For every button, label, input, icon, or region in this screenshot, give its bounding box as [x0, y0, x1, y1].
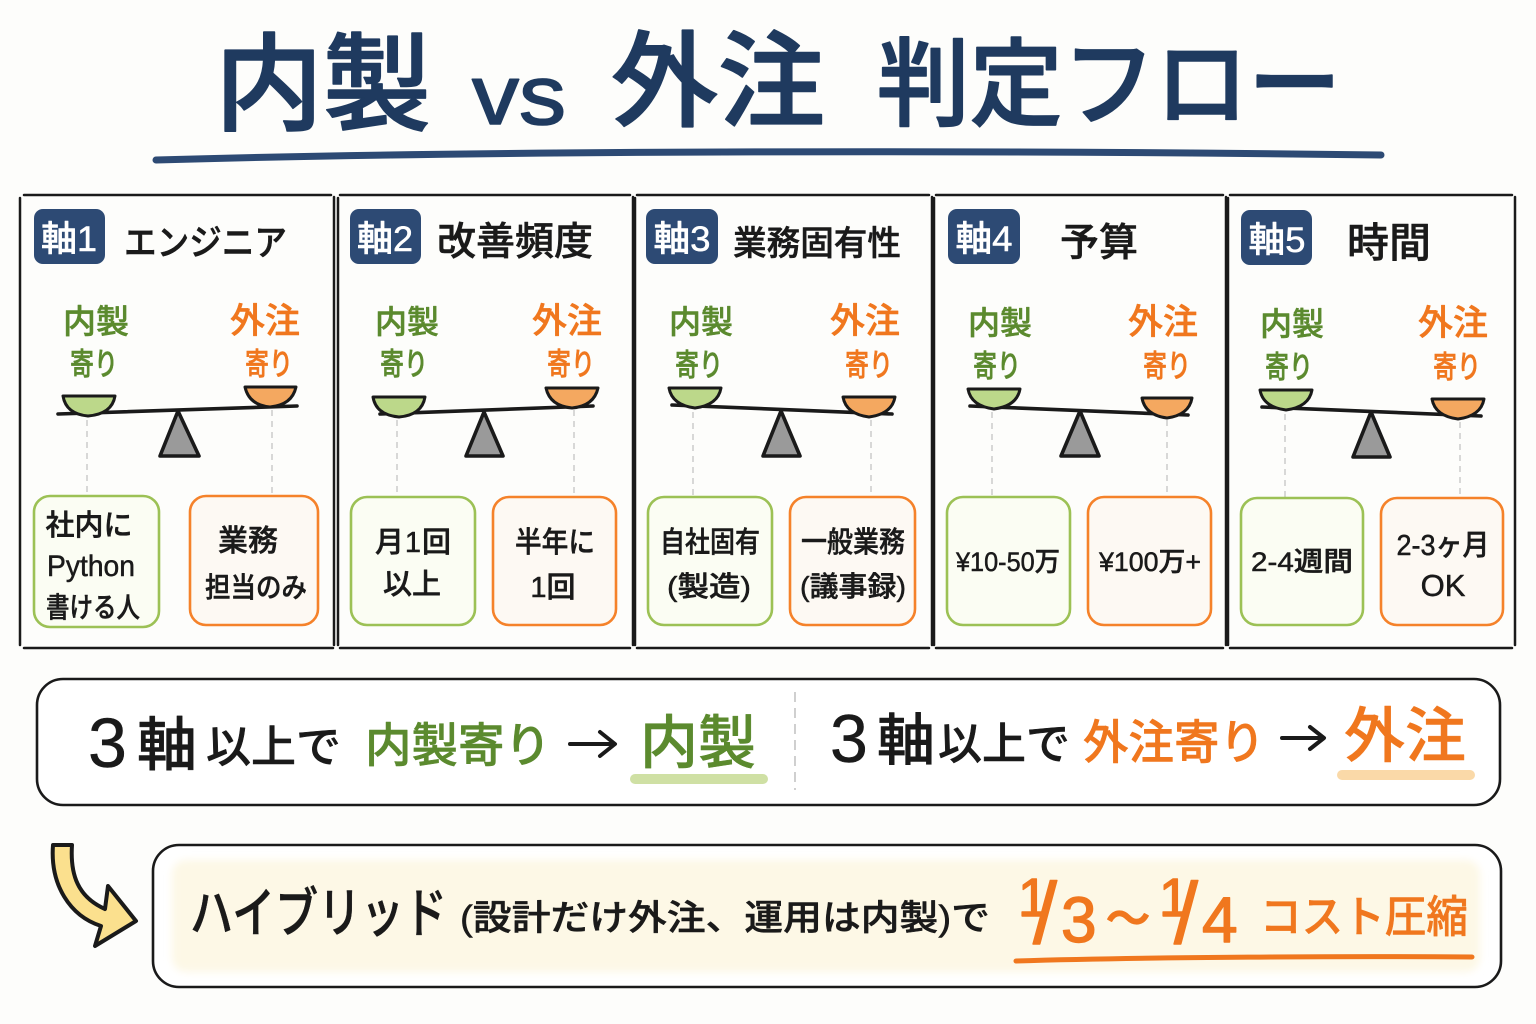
- heading: 時間: [1347, 220, 1431, 266]
- label: 内製寄り: 寄り: [675, 348, 723, 383]
- tag: 軸3: [646, 209, 718, 264]
- rule text: 内製: 内製寄り: [365, 719, 551, 772]
- hybrid text: [190, 884, 990, 944]
- cost reduction: [1018, 866, 1468, 962]
- cost reduction: /: [1033, 866, 1057, 962]
- box: 外注 condition: [1088, 497, 1211, 625]
- label: 内製寄り: 内製: [375, 304, 439, 340]
- label: 内製寄り: [1260, 306, 1324, 385]
- box: 内製 condition: 社内に: [45, 509, 133, 542]
- panel: 軸4 予算: [934, 195, 1226, 648]
- rule text: 内製: [88, 704, 756, 782]
- rule text: 外注: 軸: [877, 709, 935, 772]
- rule text: 内製: 以上で: [206, 723, 341, 772]
- panel: 軸2 改善頻度: [338, 195, 633, 648]
- label: 内製寄り: [63, 303, 129, 382]
- label: 外注寄り: 寄り: [547, 347, 595, 382]
- cost reduction: ～: [1106, 895, 1150, 944]
- label: 外注寄り: [532, 302, 602, 382]
- title: vs: [472, 48, 566, 142]
- box: 内製 condition: (製造): [667, 571, 751, 602]
- title underline: [156, 152, 1381, 160]
- tag: 軸3: 軸3: [654, 220, 710, 259]
- box: 外注 condition: 業務: [218, 525, 278, 558]
- box: 内製 condition: [947, 497, 1070, 625]
- panel: 軸3 業務固有性: [635, 195, 932, 648]
- icon: curved arrow: [53, 845, 136, 946]
- label: 外注寄り: 寄り: [1143, 349, 1191, 384]
- title: 外注: [611, 25, 825, 141]
- label: 外注寄り: [830, 302, 900, 383]
- box: 外注 condition: 1回: [530, 572, 576, 604]
- underline: [1016, 957, 1472, 961]
- heading: 予算: [1060, 222, 1138, 265]
- box: 外注 condition: ¥100万+: [1098, 547, 1201, 577]
- tag: 軸1: 軸1: [41, 220, 97, 259]
- label: 内製寄り: 寄り: [1265, 350, 1313, 385]
- highlight: 内製: [635, 774, 763, 784]
- label: 内製寄り: 内製: [968, 305, 1032, 341]
- label: 内製寄り: [968, 305, 1032, 384]
- cost reduction: 1: [1159, 868, 1189, 928]
- panel: decision rule: [37, 679, 1500, 805]
- box: 内製 condition: [1241, 498, 1363, 625]
- label: 外注寄り: [1128, 303, 1198, 384]
- box: 外注 condition: [493, 497, 616, 625]
- box: 外注 condition: [190, 496, 318, 625]
- label: 外注寄り: 外注: [1128, 303, 1198, 342]
- panel: 軸5 時間: [1228, 195, 1515, 648]
- box: 外注 condition: 2-3ヶ月: [1396, 530, 1490, 562]
- box: 内製 condition: 書ける人: [46, 592, 140, 623]
- label: 外注寄り: 寄り: [1433, 350, 1481, 385]
- box: 外注 condition: [790, 497, 915, 625]
- scale tilted to 内製 up: [1260, 390, 1484, 498]
- label: 外注寄り: 外注: [230, 302, 300, 341]
- title: [215, 25, 1341, 145]
- label: 外注寄り: 寄り: [245, 347, 293, 382]
- divider: [794, 692, 796, 790]
- heading: 業務固有性: [733, 225, 901, 263]
- arrow: 内製 rule: [570, 732, 615, 756]
- rule text: 外注: 3: [830, 701, 868, 777]
- scale tilted to 外注 up: [58, 387, 297, 498]
- label: 内製寄り: 内製: [1260, 306, 1324, 342]
- cost reduction: コスト圧縮: [1260, 893, 1468, 942]
- label: 内製寄り: 寄り: [380, 347, 428, 382]
- label: 内製寄り: [375, 304, 439, 382]
- box: 内製 condition: Python: [47, 550, 135, 583]
- cost reduction: 1: [1018, 868, 1048, 928]
- cost reduction: /: [1174, 866, 1198, 962]
- box: 内製 condition: 月1回: [375, 527, 451, 559]
- tag: 軸1: [34, 209, 105, 264]
- label: 内製寄り: 寄り: [973, 349, 1021, 384]
- rule text: 外注: 外注寄り: [1083, 716, 1265, 769]
- box: 内製 condition: ¥10-50万: [955, 547, 1060, 577]
- box: 外注 condition: OK: [1421, 568, 1466, 603]
- label: 内製寄り: [669, 304, 733, 383]
- tag: 軸5: 軸5: [1248, 221, 1306, 260]
- highlight: 外注: [1342, 770, 1470, 780]
- scale tilted to 内製 up: [669, 388, 895, 497]
- rule text: 外注: [830, 701, 1466, 777]
- hybrid text: ハイブリッド: [190, 884, 447, 944]
- tag: 軸2: [350, 209, 421, 264]
- box: 内製 condition: [351, 497, 475, 625]
- label: 内製寄り: 寄り: [70, 347, 118, 382]
- cost reduction: 4: [1202, 884, 1238, 956]
- rule text: 内製: 3: [88, 704, 127, 782]
- rule text: 外注: 外注: [1344, 703, 1466, 770]
- label: 内製寄り: 内製: [63, 303, 129, 340]
- box: 外注 condition: 担当のみ: [205, 572, 307, 603]
- arrow: 外注 rule: [1282, 727, 1324, 749]
- scale tilted to 外注 up: [373, 388, 598, 498]
- label: 外注寄り: [230, 302, 300, 382]
- rule text: 内製: 軸: [137, 713, 197, 778]
- rule text: 内製: 内製: [640, 711, 756, 776]
- box: 外注 condition: [1381, 498, 1503, 625]
- box: 内製 condition: 以上: [383, 569, 441, 601]
- scale tilted to 内製 up: [968, 389, 1192, 497]
- heading: エンジニア: [124, 222, 287, 263]
- cost reduction: 3: [1061, 884, 1097, 956]
- label: 外注寄り: [1418, 304, 1488, 385]
- box: 外注 condition: (議事録): [800, 571, 906, 602]
- box: 内製 condition: 自社固有: [660, 526, 760, 559]
- box: 内製 condition: 2-4週間: [1251, 547, 1353, 577]
- label: 外注寄り: 外注: [532, 302, 602, 341]
- box: 外注 condition: 半年に: [515, 526, 595, 559]
- tag: 軸4: [948, 209, 1020, 264]
- panel: 軸1 エンジニア: [20, 195, 334, 648]
- label: 外注寄り: 外注: [830, 302, 900, 341]
- label: 内製寄り: 内製: [669, 304, 733, 340]
- tag: 軸4: 軸4: [956, 220, 1012, 259]
- wash: [172, 860, 1480, 972]
- heading: 改善頻度: [437, 221, 593, 264]
- title: 内製: [215, 27, 431, 145]
- tag: 軸5: [1241, 210, 1312, 265]
- box: 外注 condition: 一般業務: [801, 526, 905, 559]
- tag: 軸2: 軸2: [357, 220, 413, 259]
- label: 外注寄り: 寄り: [845, 348, 893, 383]
- rule text: 外注: 以上で: [938, 720, 1070, 769]
- label: 外注寄り: 外注: [1418, 304, 1488, 343]
- panel: hybrid conclusion: [153, 845, 1501, 987]
- title: 判定フロー: [877, 32, 1341, 139]
- hybrid text: (設計だけ外注、運用は内製)で: [460, 899, 990, 938]
- box: 内製 condition: [648, 497, 772, 625]
- box: 内製 condition: [34, 496, 159, 627]
